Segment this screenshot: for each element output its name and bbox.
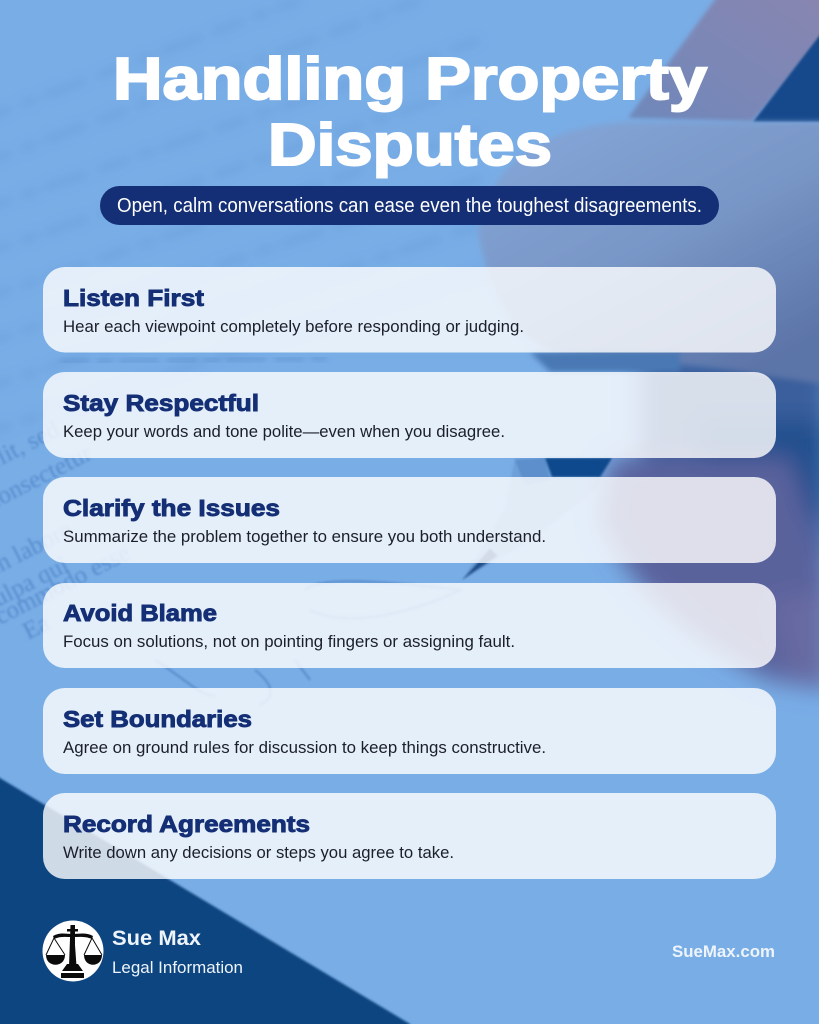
panel: Stay Respectful (43, 372, 776, 458)
pen (462, 458, 612, 580)
background document lettering: Ea (18, 609, 54, 645)
panel: Clarify the Issues (43, 477, 776, 563)
panel: Listen First (43, 267, 776, 352)
background document lettering (0, 416, 134, 645)
panel: Record Agreements (43, 793, 776, 879)
panel: Listen First: Hear each viewpoint completely before responding or judging. (63, 317, 524, 336)
title: Handling Property (113, 46, 707, 112)
panel: Record Agreements: Write down any decisions or steps you agree to take. (63, 843, 454, 862)
title: Disputes (268, 112, 552, 178)
dark corner shape (0, 754, 410, 1024)
subtitle pill (100, 186, 719, 225)
panel: Set Boundaries (43, 688, 776, 774)
icon: scales of justice logo (42, 920, 104, 982)
brand name: Legal Information (112, 958, 243, 977)
title (113, 46, 707, 178)
panel: Avoid Blame: Avoid Blame (63, 600, 217, 626)
panel: Listen First: Listen First (63, 285, 204, 311)
website: SueMax.com (672, 942, 775, 961)
signature (155, 581, 460, 705)
panel: Clarify the Issues: Clarify the Issues (63, 495, 280, 521)
panel: Clarify the Issues: Summarize the problem together to ensure you both understand. (63, 527, 546, 546)
subtitle pill: Open, calm conversations can ease even the toughest disagreements. (117, 194, 702, 217)
hand (478, 0, 819, 690)
panel: Stay Respectful: Stay Respectful (63, 390, 259, 416)
brand name (112, 927, 243, 977)
panel: Set Boundaries: Agree on ground rules for discussion to keep things constructive. (63, 738, 546, 757)
panel: Avoid Blame: Focus on solutions, not on pointing fingers or assigning fault. (63, 632, 515, 651)
panel: Avoid Blame (43, 583, 776, 668)
panel: Stay Respectful: Keep your words and tone polite—even when you disagree. (63, 422, 505, 441)
panel: Set Boundaries: Set Boundaries (63, 706, 252, 732)
brand name: Sue Max (112, 927, 201, 950)
panel: Record Agreements: Record Agreements (63, 811, 310, 837)
